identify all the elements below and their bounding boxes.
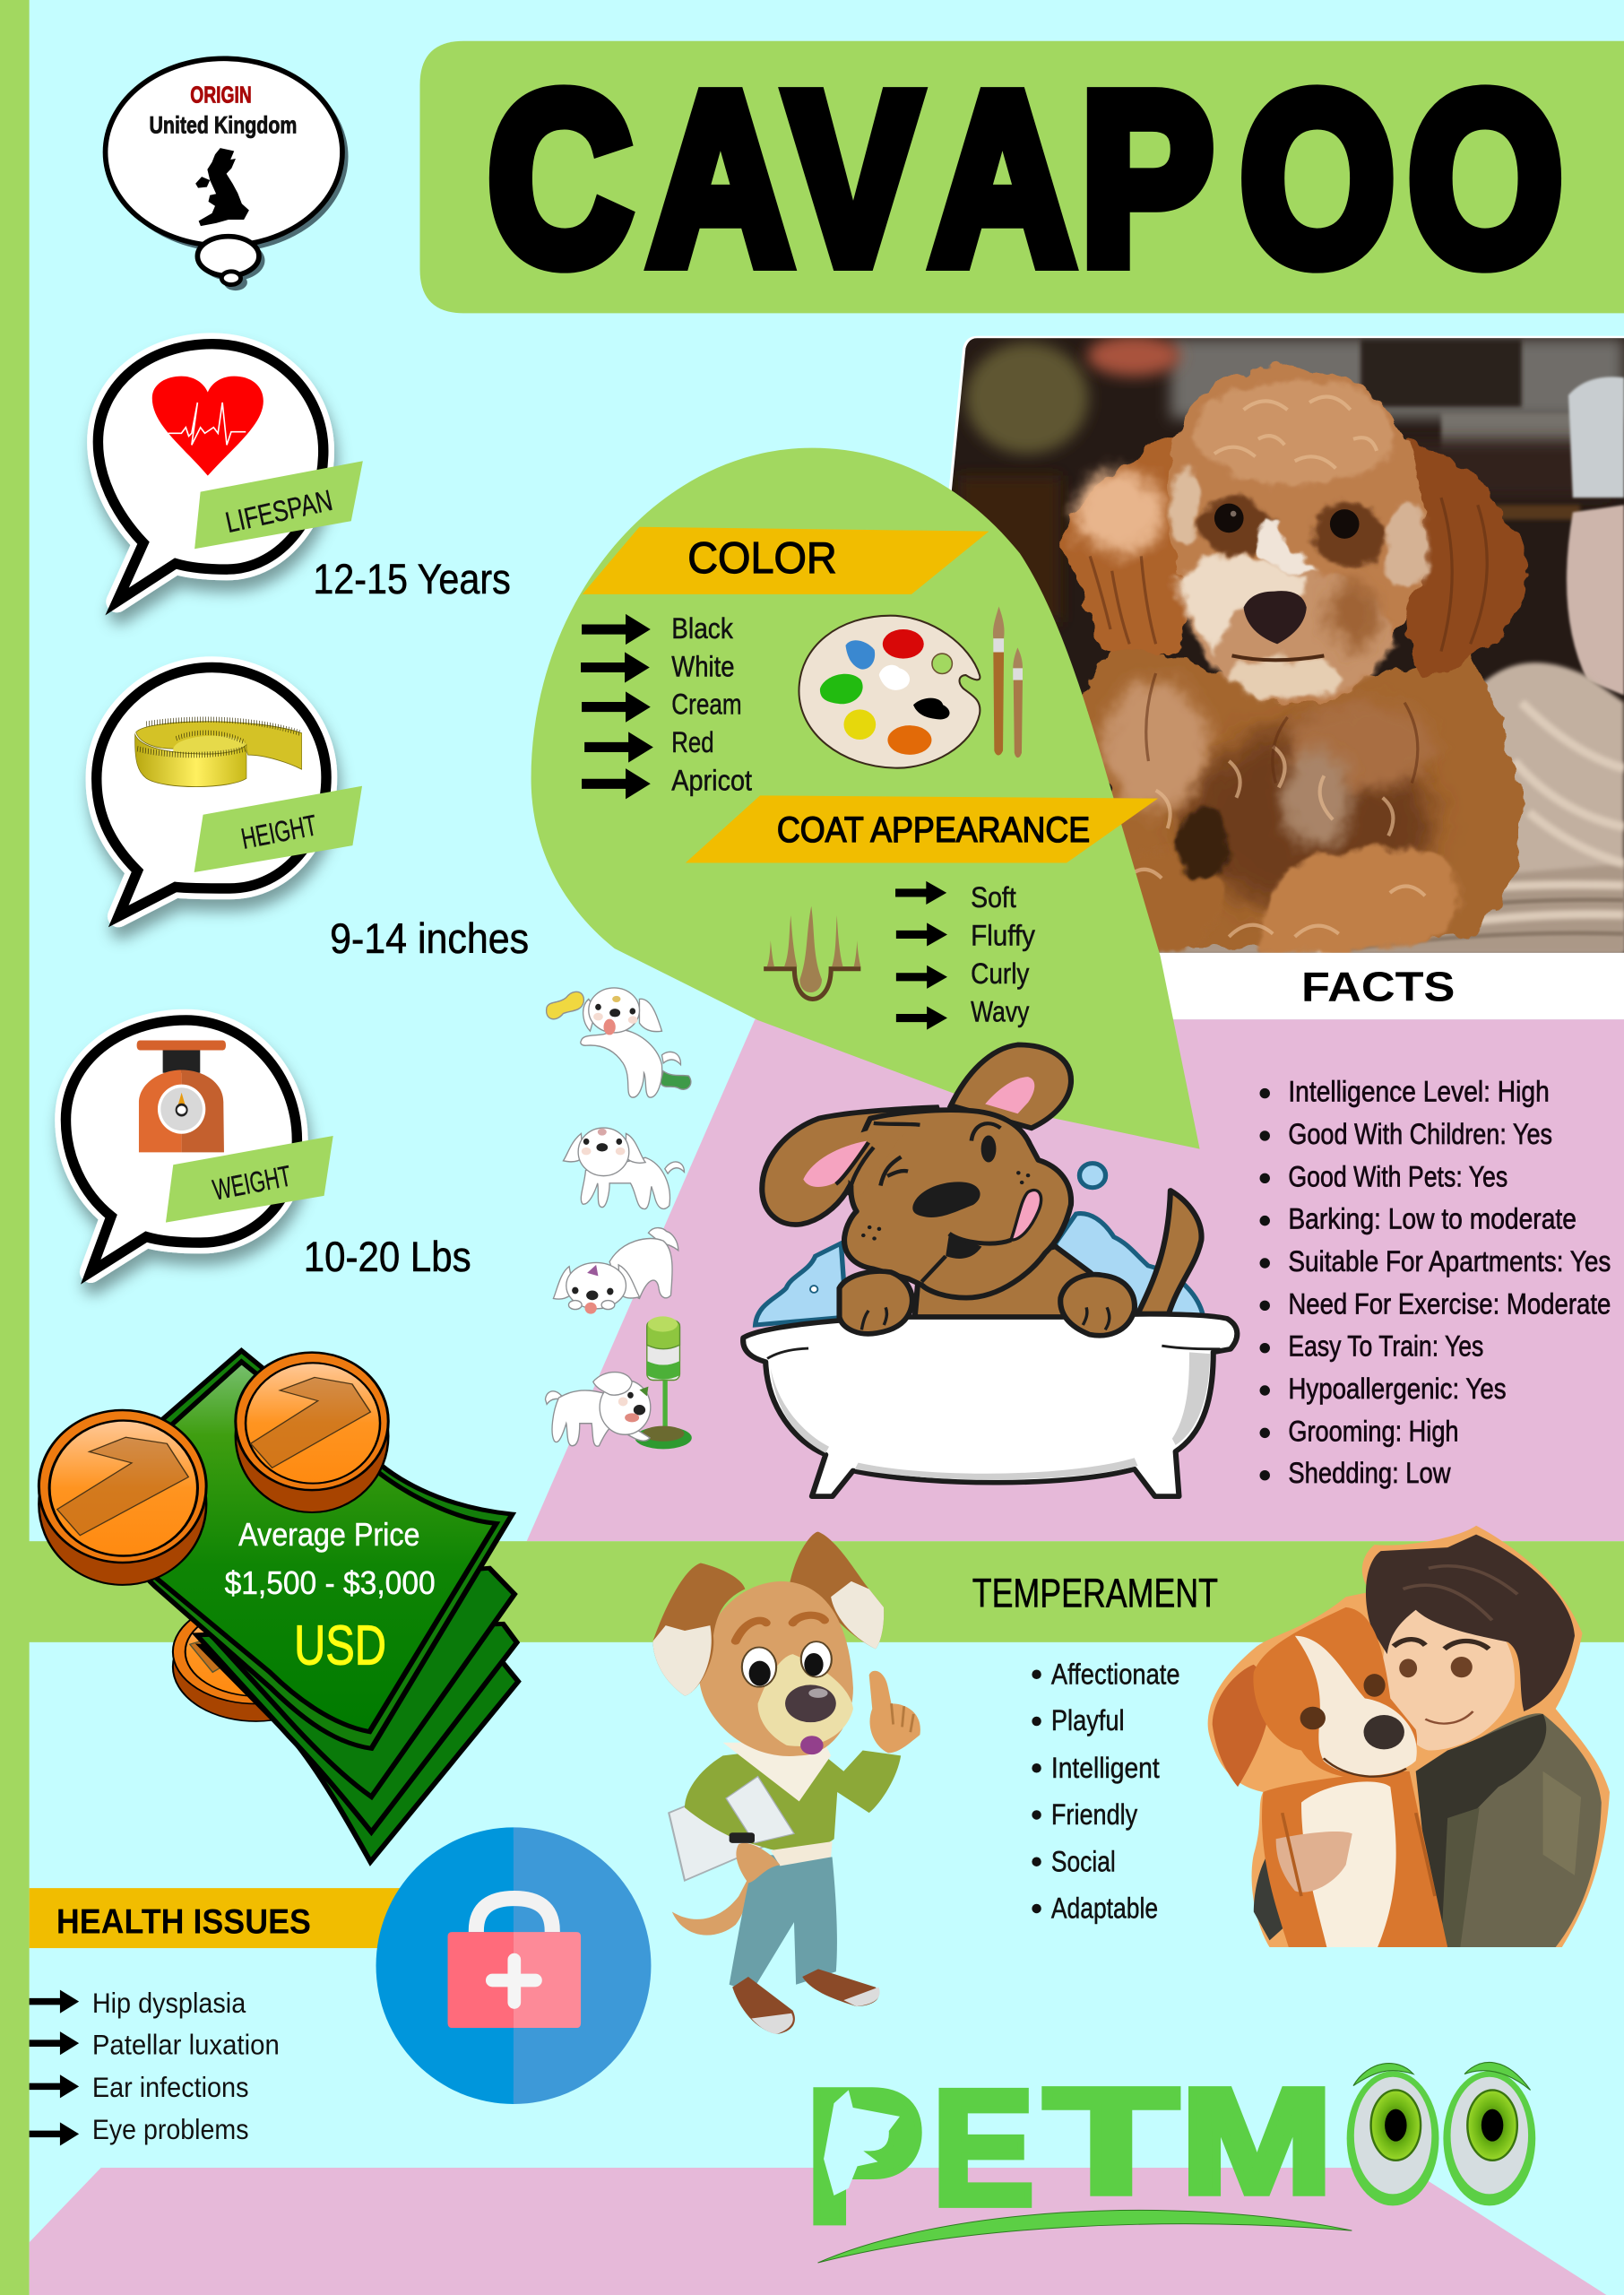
ears [1062, 432, 1200, 655]
weight tag [166, 1136, 333, 1223]
color list: White [671, 649, 734, 682]
facts list: Intelligence Level: High [1288, 1075, 1550, 1108]
panel: color and coat teardrop [531, 448, 1200, 1149]
icon: paint palette [799, 606, 1023, 768]
green temperament band [0, 1541, 1624, 1642]
temperament heading: TEMPERAMENT [972, 1571, 1218, 1616]
facts list: Good With Children: Yes [1288, 1117, 1552, 1150]
head [844, 1110, 1071, 1298]
eyes and nose [1214, 504, 1244, 533]
title banner [420, 41, 1624, 314]
left green strip [0, 0, 30, 2295]
icon: UK map [195, 148, 249, 226]
head [1166, 366, 1426, 707]
logo eyes [1347, 2062, 1535, 2205]
facts list [1260, 1075, 1611, 1489]
health list [30, 1988, 280, 2145]
health list: Eye problems [92, 2114, 249, 2145]
height speech bubble [97, 667, 362, 916]
lifespan tag [194, 461, 363, 549]
petmoo logo [805, 2044, 1535, 2263]
title text: CAVAPOO [488, 44, 1562, 314]
temperament list: Affectionate [1051, 1657, 1180, 1690]
facts list: Shedding: Low [1288, 1456, 1451, 1489]
currency: USD [294, 1615, 386, 1676]
lifespan label: LIFESPAN [222, 483, 335, 539]
icon: heart with pulse [152, 377, 263, 476]
coat appearance banner [686, 795, 1158, 862]
tub [743, 1314, 1237, 1496]
facts list: Good With Pets: Yes [1288, 1159, 1507, 1192]
facts list: Barking: Low to moderate [1288, 1202, 1576, 1235]
color list: Red [671, 725, 714, 758]
icon: kitchen scale [137, 1040, 226, 1152]
facts header band [1141, 953, 1624, 1019]
height tag [194, 786, 362, 872]
price graphic [39, 1351, 518, 1862]
temperament list: Friendly [1051, 1797, 1138, 1831]
icon: tape measure [135, 720, 302, 787]
logo letters: T [1045, 2058, 1178, 2225]
icon: medical bag in circle [376, 1827, 651, 2104]
body [1086, 644, 1523, 948]
coat list: Fluffy [971, 919, 1036, 952]
logo swoosh [818, 2210, 1352, 2263]
ears [951, 1044, 1071, 1128]
temperament list: Social [1051, 1844, 1116, 1877]
facts list: Grooming: High [1288, 1414, 1459, 1447]
coat list [895, 880, 1036, 1030]
health list: Patellar luxation [92, 2029, 280, 2060]
coins [39, 1353, 388, 1585]
health banner [30, 1888, 410, 1948]
coat list: Wavy [971, 995, 1030, 1028]
color heading: COLOR [687, 534, 837, 583]
color list: Cream [671, 688, 742, 721]
weight speech bubble [65, 1020, 333, 1272]
paws [840, 1271, 912, 1334]
facts list: Hypoallergenic: Yes [1288, 1372, 1507, 1405]
coin behind bills [173, 1599, 340, 1721]
origin country: United Kingdom [150, 112, 297, 139]
price range: $1,500 - $3,000 [225, 1564, 436, 1601]
color banner [583, 527, 989, 594]
stacked bills [69, 1351, 518, 1862]
price label: Average Price [238, 1516, 420, 1553]
temperament list: Intelligent [1051, 1751, 1160, 1784]
logo letters: P [805, 2049, 925, 2262]
dog silhouette in P [824, 2090, 900, 2195]
coat appearance heading: COAT APPEARANCE [777, 810, 1090, 850]
health list: Ear infections [92, 2072, 249, 2103]
dog in bathtub [743, 1044, 1237, 1496]
color list: Black [671, 611, 733, 645]
puppy with toys [547, 988, 691, 1097]
color list [581, 611, 752, 799]
temperament list [1032, 1657, 1180, 1925]
icon: hair follicle [764, 906, 860, 999]
facts list: Easy To Train: Yes [1288, 1329, 1483, 1363]
small puppies [545, 988, 692, 1449]
fur streaks and curls [1127, 396, 1425, 937]
logo letters: O [1351, 2044, 1435, 2237]
lifespan speech bubble [98, 344, 363, 602]
blanket [1141, 663, 1624, 953]
origin thought bubble [106, 58, 349, 290]
puppy at feeder [545, 1316, 692, 1449]
health issues section [30, 1827, 651, 2145]
photo: cavapoo dog [937, 329, 1624, 958]
coat list: Soft [971, 880, 1016, 914]
boy hugging dog sticker [1208, 1526, 1610, 1947]
tail [1138, 1191, 1202, 1313]
logo letters: O [1447, 2044, 1532, 2237]
logo letters: E [932, 2056, 1034, 2239]
health heading: HEALTH ISSUES [56, 1903, 311, 1942]
health list: Hip dysplasia [92, 1988, 246, 2019]
foam [756, 1164, 1203, 1325]
color list: Apricot [671, 764, 752, 797]
facts heading: FACTS [1301, 964, 1455, 1010]
height value: 9-14 inches [330, 915, 529, 963]
cartoon dog teacher [653, 1532, 920, 2034]
coat list: Curly [971, 957, 1030, 990]
temperament list: Playful [1051, 1703, 1125, 1736]
logo letters [805, 2044, 1532, 2262]
temperament list: Adaptable [1051, 1892, 1158, 1925]
pillows [1568, 377, 1624, 498]
puppy bowing [553, 1228, 678, 1314]
puppy standing [563, 1128, 684, 1209]
body [915, 1246, 1138, 1317]
weight value: 10-20 Lbs [304, 1234, 471, 1281]
pink facts panel [527, 1019, 1624, 1541]
origin label: ORIGIN [190, 81, 252, 108]
weight label: WEIGHT [210, 1158, 294, 1207]
dog with furry edges [1062, 366, 1531, 953]
height label: HEIGHT [238, 808, 320, 855]
logo letters: M [1180, 2058, 1333, 2225]
bottom pink shape [30, 2168, 1606, 2295]
lifespan value: 12-15 Years [313, 556, 511, 603]
